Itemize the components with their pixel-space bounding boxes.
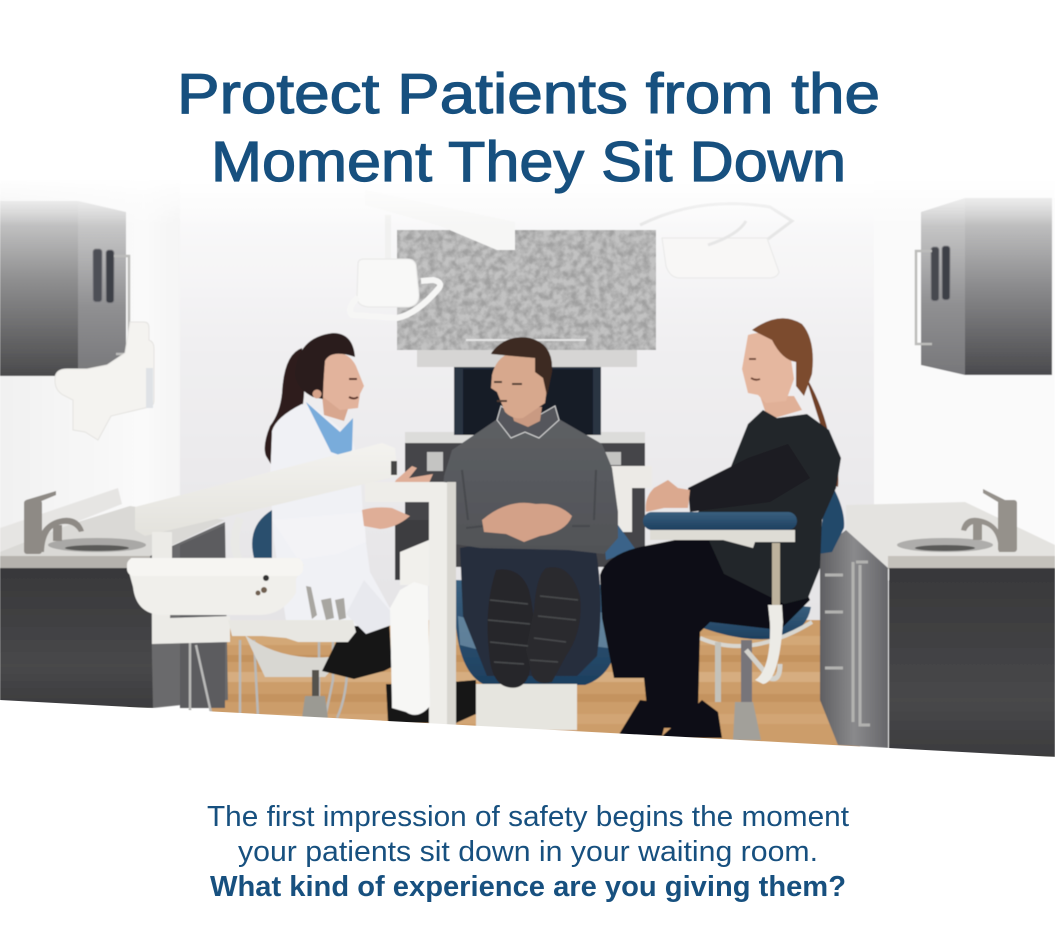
patient: collar bbox=[497, 406, 559, 438]
doctor: coat lower flap bbox=[346, 580, 400, 634]
right faucet bbox=[961, 489, 1017, 552]
doctor: upper hand bbox=[389, 466, 433, 496]
patient chair backrest bbox=[420, 500, 636, 585]
patient: neck bbox=[510, 407, 542, 427]
chair plastic highlights bbox=[458, 610, 612, 649]
patient: arm folds bbox=[462, 470, 596, 528]
patient: shoe tread bbox=[488, 596, 578, 664]
assistant: jacket bbox=[696, 410, 841, 604]
delivery unit left post bbox=[152, 532, 230, 644]
patient: polo shirt bbox=[440, 414, 618, 554]
right counter and base cabinet bbox=[820, 502, 1055, 757]
title: Protect Patients from the bbox=[177, 62, 880, 126]
assistant: face bbox=[742, 333, 794, 403]
doctor: trousers bbox=[322, 605, 476, 723]
right exam light bbox=[640, 204, 792, 278]
doctor: lower hand bbox=[362, 507, 410, 529]
doctor: coat bbox=[270, 404, 392, 626]
doctor: shirt bbox=[306, 402, 353, 457]
doctor's stool bbox=[235, 518, 345, 718]
doctor: eye and smile bbox=[349, 379, 358, 398]
doctor's chair back bbox=[252, 510, 272, 558]
right sink bbox=[897, 538, 993, 552]
delivery arm bbox=[135, 443, 398, 536]
closing message: What kind of experience are you giving them? bbox=[210, 871, 846, 903]
patient chair base bbox=[476, 684, 577, 730]
title: Moment They Sit Down bbox=[211, 130, 846, 194]
water bottle and holder bbox=[390, 540, 430, 715]
tray connectors bbox=[256, 575, 269, 596]
monitor bbox=[454, 367, 601, 435]
doctor: sleeve bbox=[272, 512, 366, 560]
granite back panel bbox=[397, 230, 656, 350]
instrument tray bbox=[127, 558, 304, 615]
doctor: face bbox=[320, 353, 364, 410]
wood floor bbox=[210, 620, 860, 760]
patient: trousers bbox=[460, 541, 601, 676]
closing message: your patients sit down in your waiting room. bbox=[238, 836, 818, 868]
patient bbox=[440, 337, 618, 688]
white wedge below photo bbox=[0, 700, 1055, 935]
top fade to white bbox=[0, 176, 1055, 226]
title bbox=[177, 62, 880, 194]
assistant stool bbox=[695, 478, 844, 740]
assistant: eye and smile bbox=[749, 359, 760, 380]
assistant bbox=[600, 318, 841, 738]
back counter and cabinet bbox=[395, 432, 652, 580]
handpieces bbox=[306, 586, 346, 620]
hoses bbox=[190, 640, 348, 720]
closing message: The first impression of safety begins the moment bbox=[207, 801, 849, 833]
wall dispenser left bbox=[55, 322, 154, 440]
assistant: arm bbox=[688, 444, 810, 512]
white band behind the title bbox=[0, 0, 1055, 178]
panel bracket bbox=[417, 350, 637, 367]
handpiece holder bbox=[228, 586, 356, 642]
patient: hair bbox=[491, 337, 552, 396]
patient: hands bbox=[482, 503, 572, 542]
assistant armrest bbox=[643, 512, 797, 684]
assistant: neck bbox=[760, 396, 802, 420]
patient: head bbox=[491, 351, 548, 418]
right wall cabinet bbox=[916, 198, 1052, 375]
doctor: ponytail bbox=[265, 348, 304, 466]
left exam light bbox=[350, 215, 440, 318]
assistant: ponytail bbox=[805, 375, 838, 487]
delivery post bbox=[365, 482, 456, 725]
assistant: trousers bbox=[600, 535, 810, 728]
patient: right shoe bbox=[526, 567, 581, 683]
photo: dental operatory scene bbox=[0, 176, 1055, 760]
assistant: hands bbox=[646, 480, 690, 512]
patient: left shoe bbox=[488, 569, 534, 688]
assistant backrest bbox=[818, 478, 844, 554]
doctor: hair bbox=[295, 333, 355, 399]
overhead light arm bbox=[365, 190, 515, 250]
assistant: shoes bbox=[618, 700, 722, 738]
patient: eyes and beard bbox=[494, 382, 522, 401]
left wall cabinet bbox=[0, 201, 129, 376]
back wall bbox=[178, 180, 875, 660]
right side wall bbox=[874, 180, 1055, 580]
left counter and base cabinet bbox=[0, 488, 228, 708]
left faucet bbox=[24, 491, 84, 554]
closing message bbox=[207, 801, 849, 903]
doctor: ear bbox=[312, 390, 322, 398]
assistant: hair bbox=[752, 318, 813, 396]
doctor: neck bbox=[322, 395, 348, 421]
doctor bbox=[265, 333, 476, 723]
left sink bbox=[48, 538, 146, 552]
left side wall bbox=[0, 180, 180, 580]
patient chair seat bbox=[455, 580, 618, 685]
